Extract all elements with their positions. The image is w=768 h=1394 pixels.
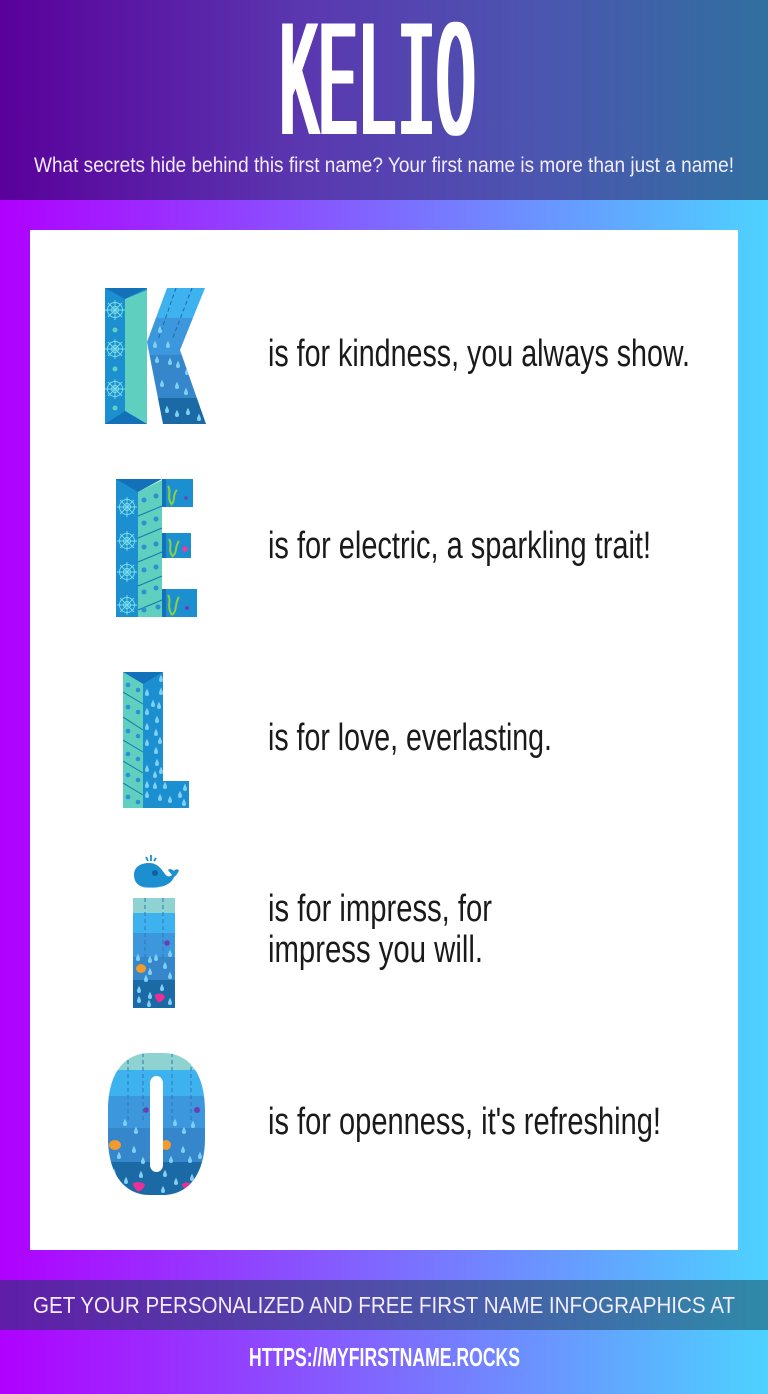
letter L illustration [123, 672, 189, 808]
text: O line: is for openness, it's refreshing! [268, 1101, 661, 1143]
text: I lines: impress you will. [268, 929, 483, 971]
text: L line: is for love, everlasting. [268, 717, 552, 759]
whale icon [134, 855, 179, 888]
footer url: HTTPS://MYFIRSTNAME.ROCKS [249, 1342, 520, 1372]
text: I lines [268, 888, 492, 971]
letter K illustration [105, 288, 210, 424]
header band [0, 0, 768, 200]
letter O illustration [108, 1053, 205, 1195]
letter I illustration [133, 898, 175, 1008]
text: E line: is for electric, a sparkling trait! [268, 525, 651, 567]
text: I lines: is for impress, for [268, 888, 492, 930]
title: KELIO [277, 0, 473, 185]
letter E illustration [116, 479, 197, 617]
footer call-to-action band [0, 1280, 768, 1330]
white panel [30, 230, 738, 1250]
